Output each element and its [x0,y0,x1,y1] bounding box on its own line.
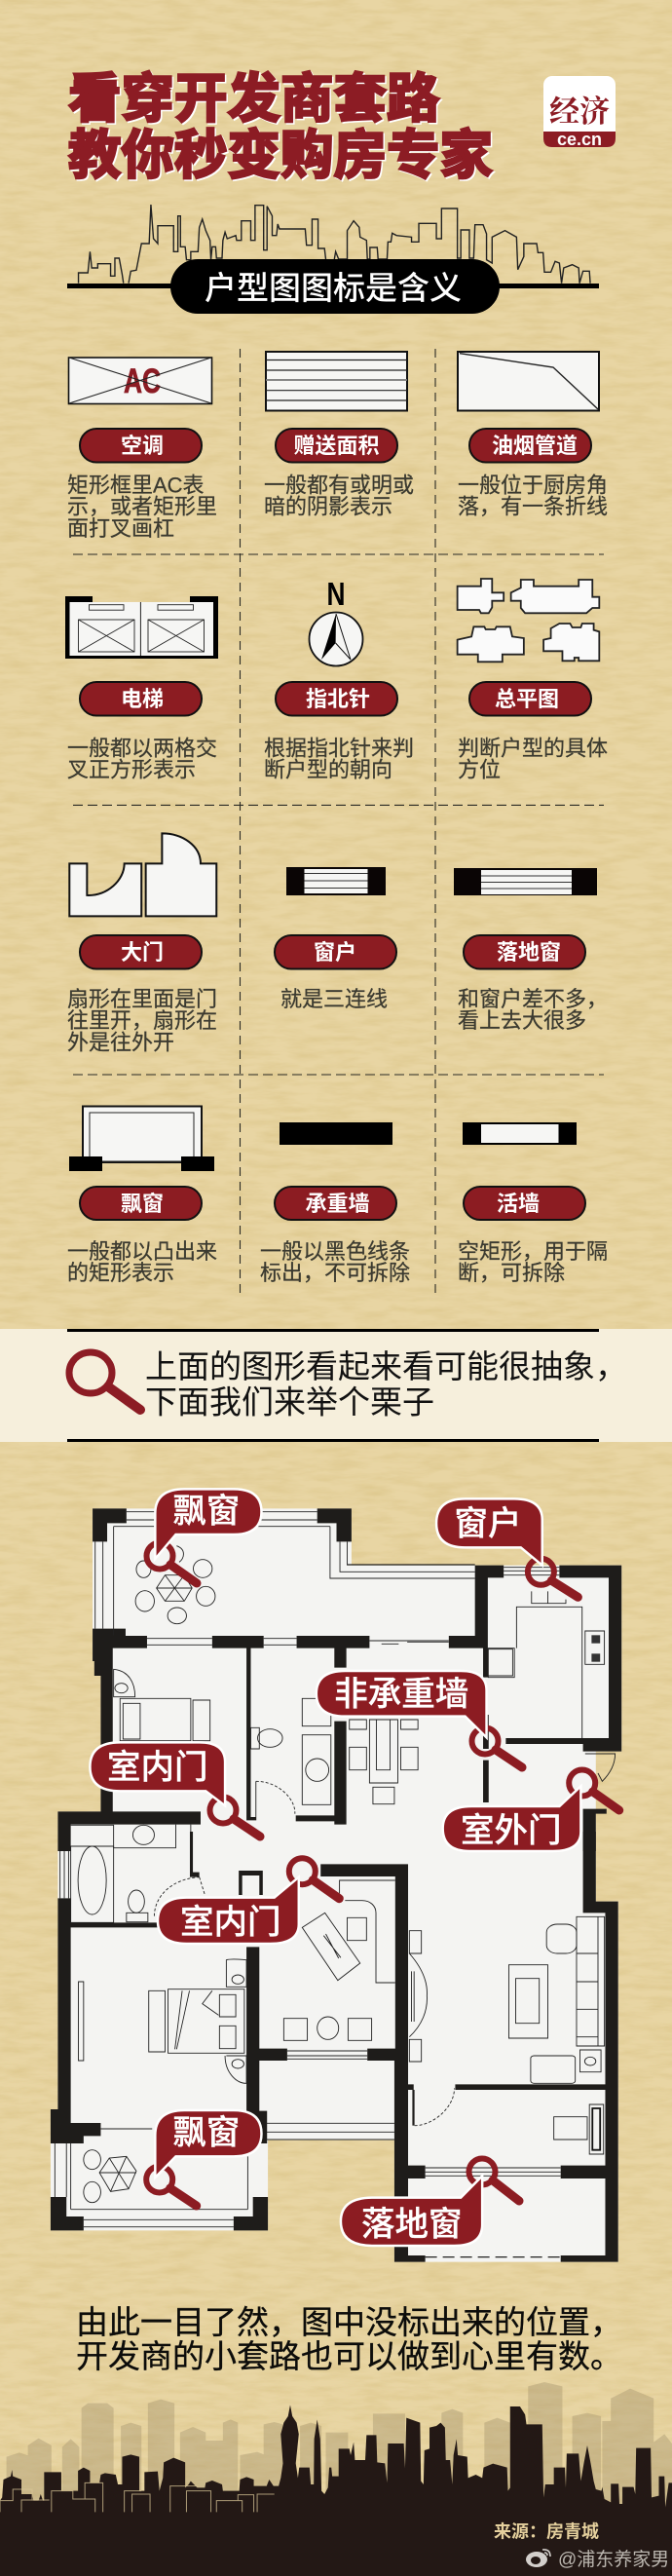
label pill [275,935,396,968]
callout: 飘窗 lower: 飘窗 [172,2114,240,2151]
icon: window [286,867,386,895]
transition text: 下面我们来举个栗子 [145,1383,434,1421]
title: 看穿开发商套路 [68,69,440,129]
label pill: 落地窗 [497,940,561,965]
heading bar: 户型图图标是含义: 户型图图标是含义 [205,270,462,306]
icon: air conditioner: AC [124,362,161,400]
furniture: dining table [350,1720,418,1804]
callout: 非承重墙: 非承重墙 [334,1676,468,1713]
icon: non-bearing wall [463,1122,577,1145]
label pill [80,1187,202,1220]
icon: elevator [65,596,218,659]
icon: site plan [458,579,599,662]
description [458,1239,608,1285]
title: 教你秒变购房专家 [68,126,493,185]
description [67,737,217,782]
label pill: 活墙 [497,1192,540,1216]
description: 一般以黑色线条 [260,1239,410,1264]
cell: 赠送面积 [264,352,414,519]
icon: air conditioner [68,358,212,403]
description: 空矩形，用于隔 [458,1239,608,1264]
label pill [464,935,585,968]
logo: ce.cn: ce.cn [557,130,602,149]
icon: shaded area [266,352,407,411]
callout: 室内门 upper: 室内门 [107,1750,208,1787]
callout: 室外门 [443,1769,619,1851]
description: 一般都有或明或 [264,474,414,497]
source credit: 来源：房青城 [494,2521,599,2541]
callout: 室内门 upper [90,1742,260,1837]
description [67,1239,217,1285]
description: 的矩形表示 [67,1261,174,1285]
icon: magnifier [69,1352,140,1410]
furniture: balcony table set [135,1546,215,1624]
entrance door [585,1754,616,1781]
label pill: 赠送面积 [294,434,380,458]
cell: 指北针 [264,576,414,782]
label pill: 窗户 [314,940,356,965]
description [67,987,217,1054]
label pill: 承重墙 [306,1192,370,1216]
label pill [275,1187,396,1220]
label pill: 飘窗 [121,1192,164,1216]
callout: 飘窗 upper: 飘窗 [172,1493,240,1530]
label pill: 油烟管道 [492,434,578,458]
description [458,987,608,1033]
bathroom sink top [71,1825,191,1848]
title: 教你秒变购房专家 [70,127,495,187]
footer skyline [0,2382,672,2576]
cell: 飘窗 [67,1107,217,1285]
icon: doors [69,833,216,916]
transition text [145,1348,627,1421]
description [67,474,217,541]
weibo handle: @浦东养家男 [558,2549,669,2570]
cell: 总平图 [458,579,608,782]
conclusion text: 开发商的小套路也可以做到心里有数。 [76,2338,622,2374]
cell: 活墙 [458,1122,608,1285]
cell: 大门 [67,833,217,1054]
label pill [80,429,202,462]
description: 暗的阴影表示 [264,495,392,519]
label pill [464,1187,585,1220]
callout: 室外门: 室外门 [461,1812,561,1849]
description: 断户型的朝向 [264,758,392,782]
title [68,69,495,187]
watermark: Weibo [526,2549,669,2570]
foreground building outlines [0,2482,275,2512]
description: 一般都以凸出来 [67,1239,217,1264]
label pill: 指北针 [306,687,370,711]
callout: 飘窗 lower [146,2110,261,2206]
plan upper part [57,1508,621,1851]
icon: weibo [526,2550,550,2567]
cell: 空调 [67,358,217,541]
description: 扇形在里面是门 [67,987,217,1011]
furniture: lower balcony set [84,2150,136,2203]
description: 方位 [458,758,501,782]
description: 断，可拆除 [458,1261,565,1285]
transition band [0,1329,672,1442]
callout: 非承重墙 [317,1671,522,1767]
cell: 承重墙 [260,1122,410,1285]
description: 落，有一条折线 [458,495,608,519]
transition text: 上面的图形看起来看可能很抽象， [145,1348,627,1384]
furniture: bathroom [71,1846,148,1922]
callout: 窗户 [436,1498,578,1597]
label pill [469,682,591,715]
furniture: bedroom and bathroom [114,1669,331,1804]
description [264,737,414,782]
description: 叉正方形表示 [67,758,196,782]
icon: compass [310,576,362,666]
skyline outline [79,205,590,284]
plan lower part [51,1832,618,2262]
description: 就是三连线 [280,987,388,1011]
icon: load-bearing wall [280,1122,392,1145]
label pill: 总平图 [495,687,559,711]
dark skyline [0,2405,672,2576]
callout: 室内门 lower: 室内门 [180,1904,280,1941]
label pill [276,429,397,462]
cell: 油烟管道 [458,352,608,519]
furniture: master bed [79,1959,246,2083]
callout: 落地窗 [341,2159,519,2246]
conclusion text: 由此一目了然，图中没标出来的位置， [76,2304,622,2340]
description: 矩形框里AC表 [67,474,205,497]
description [264,474,414,519]
label pill: 电梯 [121,687,164,711]
description: 面打叉画杠 [67,516,174,541]
callout: 落地窗: 落地窗 [361,2206,462,2243]
label pill: 空调 [121,434,164,458]
grid dividers [73,349,604,1298]
callout: 室内门 lower [158,1858,339,1944]
logo: ce.cn [543,76,616,149]
description: 判断户型的具体 [458,737,608,760]
icon: floor-to-ceiling window [454,868,597,895]
cell: 落地窗 [454,868,608,1033]
label pill [80,935,202,968]
description: 往里开，扇形在 [67,1008,217,1033]
icon: flue [458,352,599,411]
cell: 窗户 [275,867,396,1011]
description: 外是往外开 [67,1030,174,1054]
label pill: 大门 [121,940,164,965]
icon: bay window [69,1107,214,1171]
title: 看穿开发商套路 [70,70,441,131]
label pill [276,682,397,715]
description: 看上去大很多 [458,1008,586,1033]
description: 根据指北针来判 [264,737,414,760]
logo: ce.cn: 经济 [549,87,610,131]
description: 和窗户差不多， [458,987,608,1011]
floor plan [51,1508,621,2262]
description: 示，或者矩形里 [67,495,217,519]
cell: 电梯 [65,596,218,782]
description [458,474,608,519]
callout: 窗户: 窗户 [454,1506,522,1543]
description: 标出，不可拆除 [260,1261,410,1285]
icon: compass: N [327,576,345,612]
description: 一般都以两格交 [67,737,217,760]
furniture: living room [409,1916,605,2154]
label pill [80,682,202,715]
callout: 飘窗 upper [146,1489,261,1583]
description: 一般位于厨房角 [458,474,608,497]
plan floor [51,1508,621,2262]
description [260,1239,410,1285]
furniture: kitchen [488,1591,605,1738]
description [458,737,608,782]
ghost skyline [7,2382,672,2507]
furniture: study [283,1880,395,2040]
conclusion text [76,2304,622,2374]
label pill [469,429,591,462]
heading bar: 户型图图标是含义 [67,259,599,314]
